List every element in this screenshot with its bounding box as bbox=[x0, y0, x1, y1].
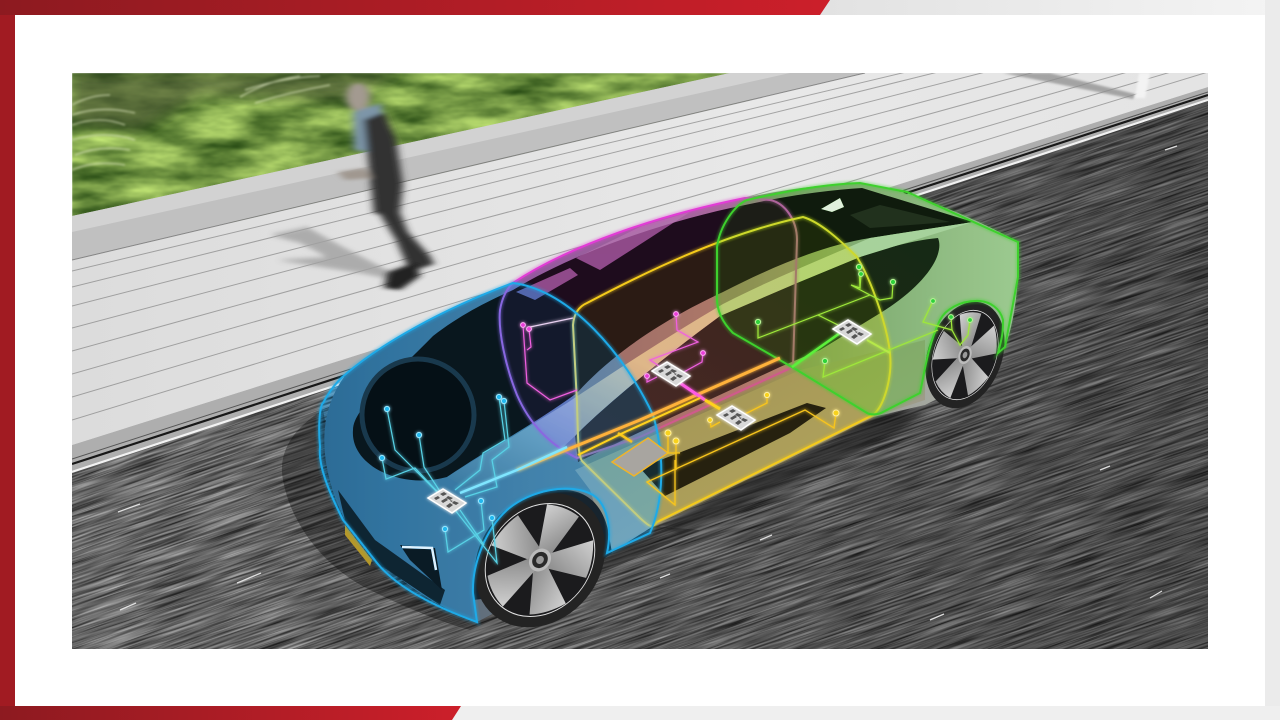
car bbox=[319, 183, 1019, 654]
front wheel bbox=[448, 466, 632, 654]
pedestrian shadow bbox=[272, 225, 392, 280]
pedestrian walking bbox=[338, 83, 434, 290]
frame: right grey bar bbox=[1265, 0, 1280, 720]
car body shell bbox=[324, 183, 1018, 622]
chip: magenta zone controller bbox=[652, 362, 690, 386]
photo scene bbox=[72, 73, 1208, 649]
concrete curb wall bbox=[72, 73, 865, 260]
rear wheel bbox=[911, 291, 1019, 419]
green zone volume bbox=[717, 183, 1018, 414]
frame: top bar bbox=[0, 0, 1280, 15]
chip: green zone controller bbox=[833, 320, 871, 344]
yellow zone volume bbox=[573, 217, 891, 526]
frame: left red bar bbox=[0, 0, 15, 720]
chip: yellow zone controller bbox=[717, 406, 755, 430]
windscreen inner dome bbox=[340, 337, 496, 493]
front bumper and intakes bbox=[338, 490, 445, 605]
orange sill light line bbox=[517, 358, 780, 470]
blue zone volume bbox=[319, 283, 661, 622]
side windows bbox=[575, 238, 939, 462]
green zone wiring bbox=[755, 264, 972, 377]
magenta zone wiring bbox=[521, 312, 705, 400]
shark fin antenna bbox=[821, 198, 844, 212]
roof glass and windscreen bbox=[353, 188, 973, 480]
grass and plants bbox=[72, 73, 752, 223]
magenta zone volume bbox=[500, 198, 797, 458]
pavement bbox=[72, 73, 1208, 445]
blue zone wiring bbox=[379, 394, 567, 563]
yellow zone wiring bbox=[578, 392, 839, 505]
roof pane highlights bbox=[516, 205, 950, 300]
frame: bottom bar bbox=[0, 706, 1280, 720]
dark floor battery bay bbox=[640, 403, 826, 496]
chip: front zone controller bbox=[428, 489, 466, 513]
car cast shadow bbox=[282, 410, 700, 630]
road white flecks bbox=[118, 146, 1177, 620]
road shading bbox=[271, 101, 1208, 649]
road surface bbox=[72, 101, 1208, 649]
battery plate bbox=[612, 438, 668, 476]
lamp post base and shadow bbox=[1003, 73, 1150, 99]
lower rocker panel bbox=[575, 340, 925, 553]
front wheel arch shading bbox=[473, 490, 612, 600]
road edge kerb bbox=[72, 87, 1208, 473]
belt line highlight band bbox=[447, 222, 973, 490]
